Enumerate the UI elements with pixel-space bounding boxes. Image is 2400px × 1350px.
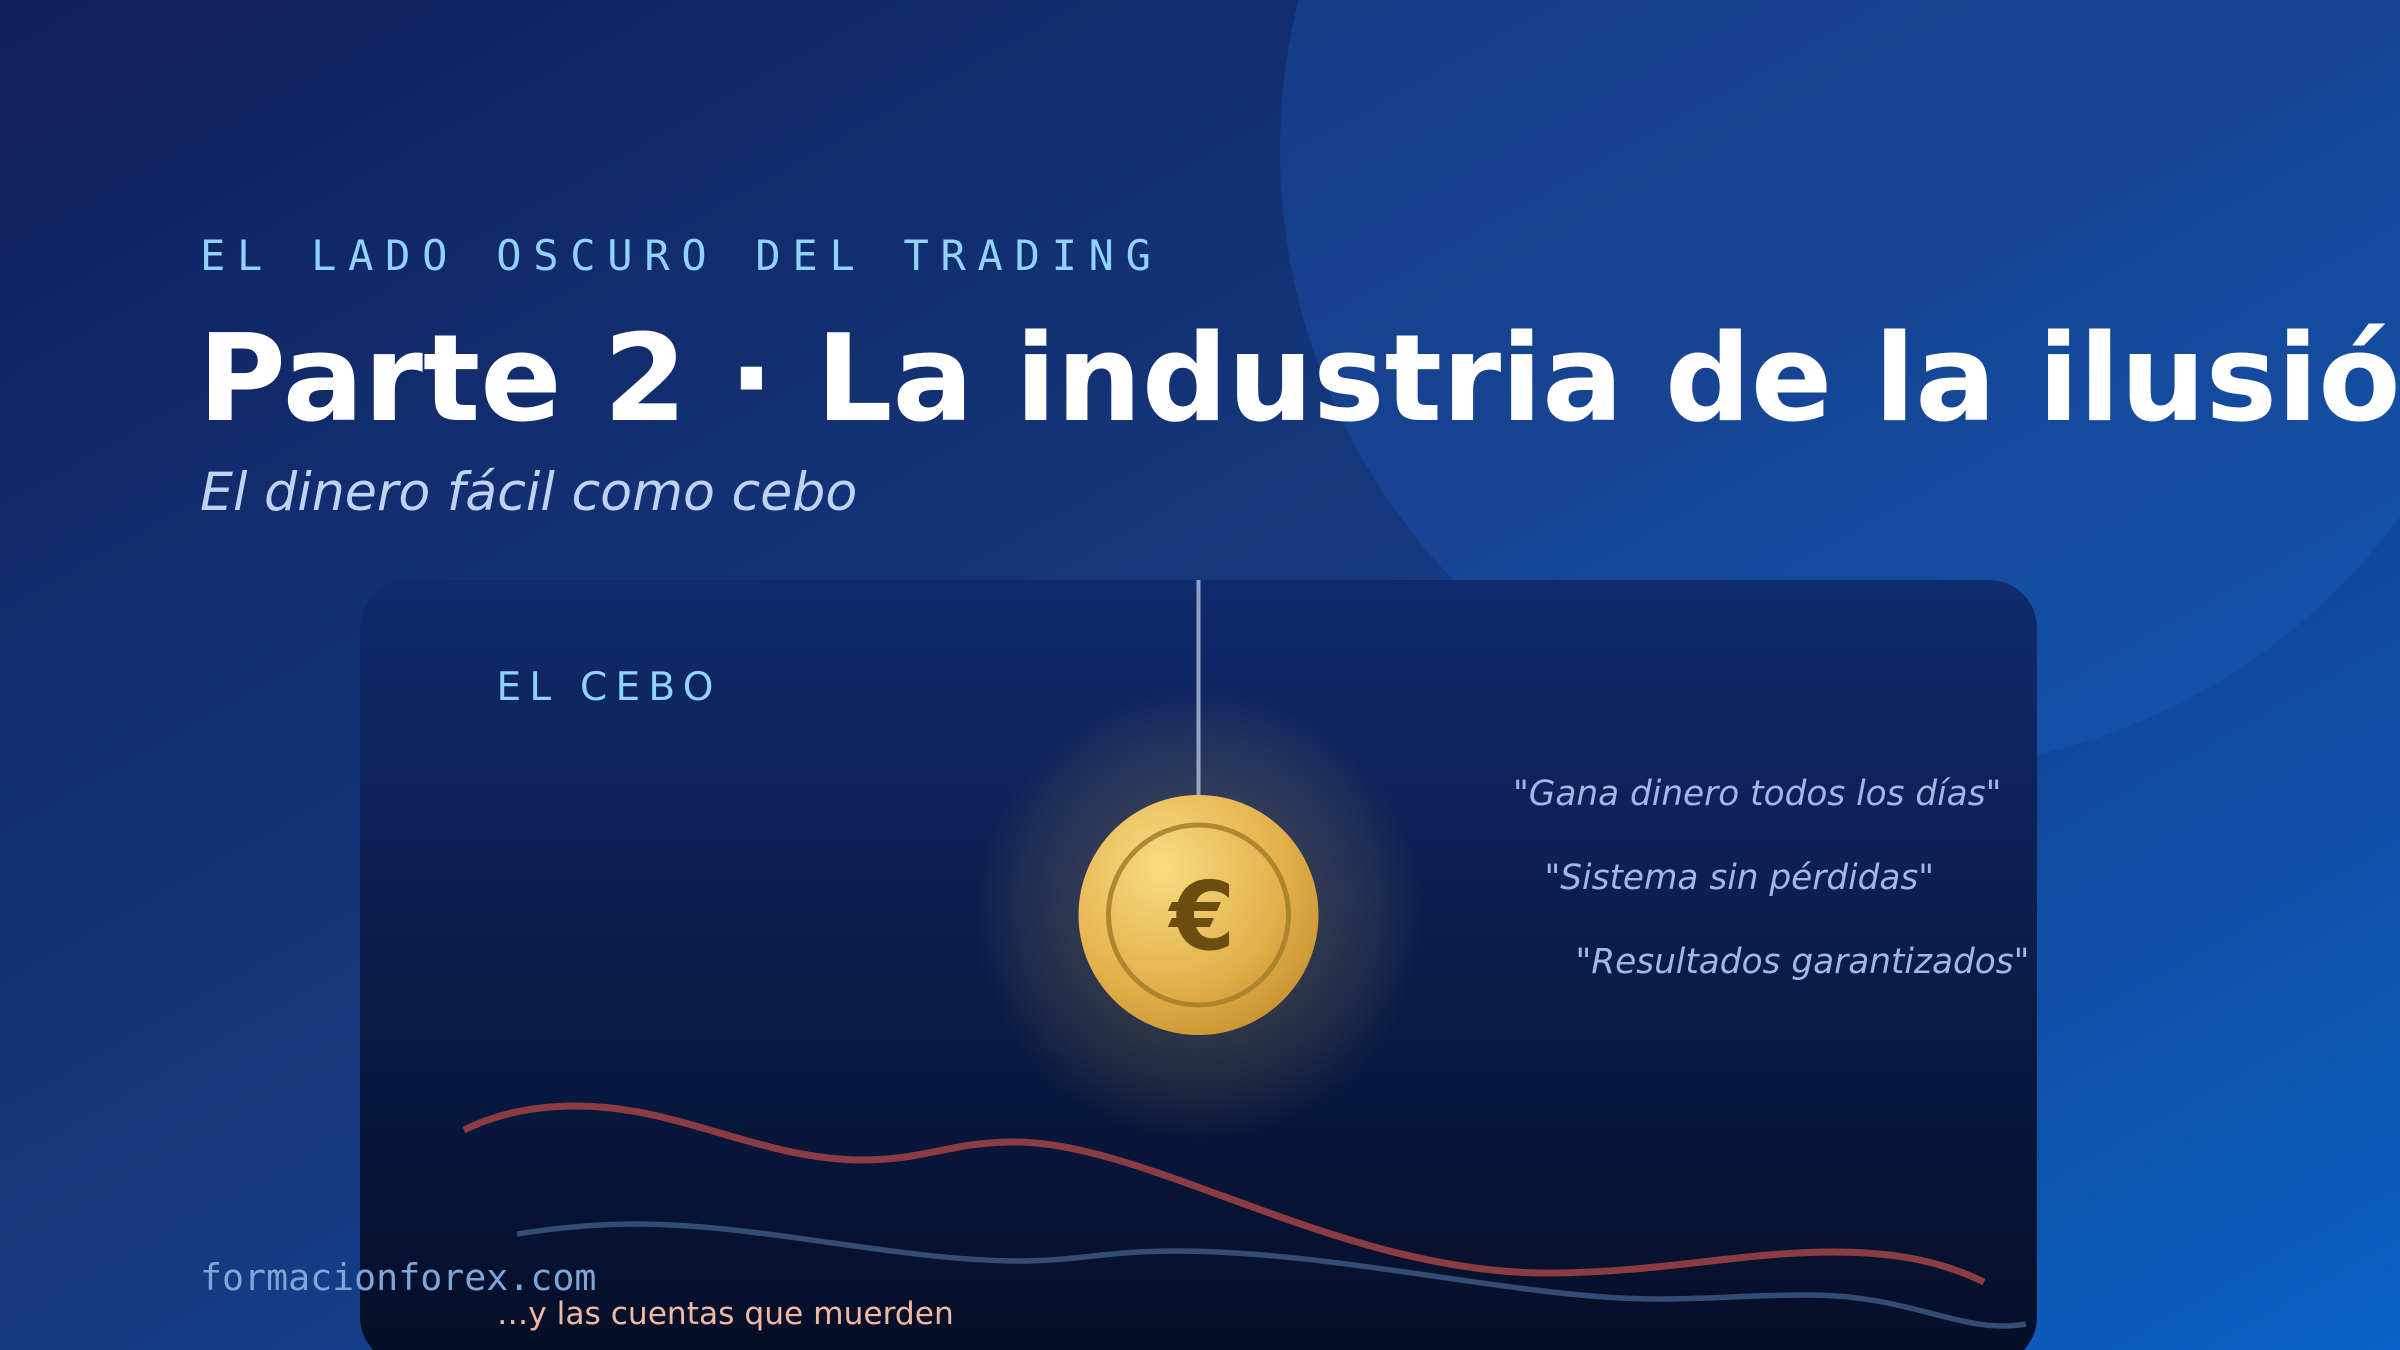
coin glow <box>974 690 1424 1140</box>
panel background <box>360 580 2037 1350</box>
red curve <box>464 1106 1984 1282</box>
blue curve <box>517 1224 2026 1326</box>
promise quote 1: "Gana dinero todos los días" <box>1513 774 2001 814</box>
panel label: EL CEBO <box>496 665 722 710</box>
icon: euro coin: € <box>1168 862 1235 972</box>
eyebrow: EL LADO OSCURO DEL TRADING <box>200 231 1163 280</box>
caption: …y las cuentas que muerden <box>497 1296 954 1332</box>
decorative circle <box>1280 0 2400 770</box>
footer url: formacionforex.com <box>200 1256 596 1299</box>
icon: euro coin <box>1078 795 1318 1035</box>
fishing line <box>1196 580 1200 795</box>
panel: el cebo <box>360 580 2037 1350</box>
promise quote 3: "Resultados garantizados" <box>1576 942 2029 982</box>
subtitle: El dinero fácil como cebo <box>200 463 857 523</box>
promise quote 2: "Sistema sin pérdidas" <box>1544 858 1934 898</box>
